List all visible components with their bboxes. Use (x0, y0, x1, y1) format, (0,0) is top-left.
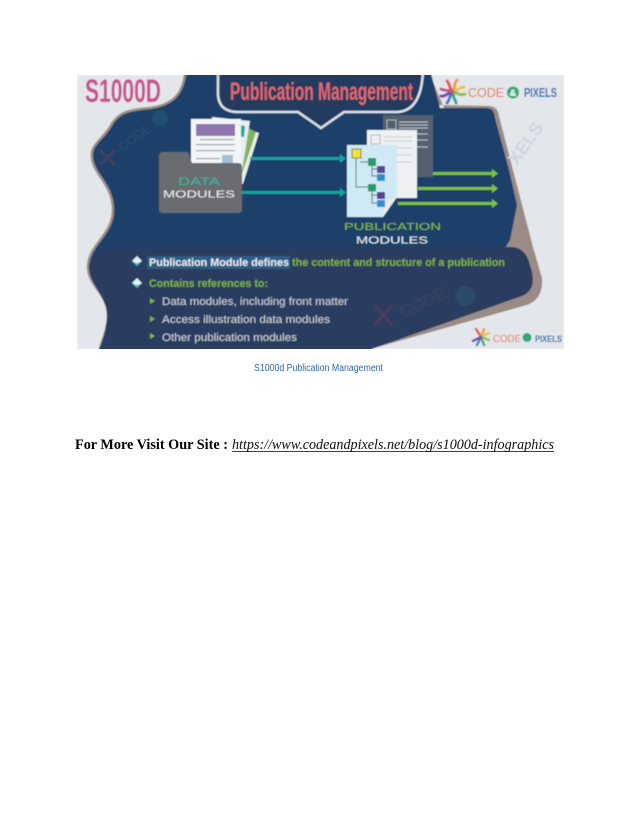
icon: pinwheel logo (441, 80, 465, 103)
dark blue main shape (89, 75, 518, 264)
link label: For More Visit Our Site : (75, 437, 228, 453)
watermark logo lower: CODE (397, 284, 449, 322)
bullet 1 green text: the content and structure of a publication (292, 257, 505, 269)
back document (383, 115, 433, 177)
logo text: CODE (468, 85, 504, 100)
front page (191, 119, 241, 169)
modules label: MODULES (163, 188, 235, 200)
icon: pinwheel logo (473, 329, 489, 345)
middle document (367, 130, 417, 198)
sub-bullet 1: Data modules, including front matter (162, 296, 348, 308)
arrow lower (242, 188, 346, 197)
logo top right (441, 80, 557, 103)
icon: diamond bullet (132, 278, 142, 288)
logo text: CODE (493, 333, 521, 345)
lower text panel (89, 247, 533, 352)
image background (77, 75, 564, 349)
watermark top right: XELS (504, 118, 547, 168)
modules label: MODULES (356, 234, 428, 246)
front document (347, 145, 397, 217)
watermark upper left: CODE (115, 120, 155, 154)
watermark upper left (100, 110, 168, 165)
infographic image (77, 70, 564, 352)
title panel (218, 70, 423, 128)
data modules folder group (159, 117, 259, 213)
folder (159, 152, 242, 213)
watermark logo lower (375, 284, 475, 325)
logo top right: PIXELS (524, 86, 557, 100)
brown border wedge right (376, 83, 543, 348)
sub-bullet 3: Other publication modules (162, 332, 298, 344)
infographic page (75, 75, 564, 452)
arrow 2 (418, 184, 498, 193)
logo bottom right: PIXELS (535, 334, 562, 345)
S1000D heading: S1000D (85, 73, 161, 109)
logo bottom right (473, 329, 562, 345)
site link line (75, 437, 554, 453)
bullet 2 text: Contains references to: (149, 278, 268, 290)
bullet list (132, 256, 505, 344)
publication modules group (344, 115, 441, 246)
tree diagram (355, 158, 378, 204)
data label: DATA (178, 176, 221, 188)
icon: diamond bullet (132, 256, 142, 266)
teal arrows (242, 154, 346, 197)
back pages (241, 131, 260, 185)
arrow 3 (398, 199, 498, 208)
image caption: S1000d Publication Management (254, 363, 383, 374)
publication label: PUBLICATION (344, 221, 441, 233)
title text: Publication Management (230, 78, 413, 106)
link underline (232, 450, 554, 453)
bullet 1 highlight (147, 256, 290, 269)
sub-bullet 2: Access illustration data modules (162, 314, 331, 326)
sub-bullet arrows (150, 298, 155, 339)
arrow upper (250, 154, 346, 163)
left border stroke (88, 70, 185, 352)
logo top right: & (510, 88, 516, 99)
green arrows (398, 169, 498, 208)
arrow 1 (433, 169, 498, 178)
bullet 1 text: Publication Module defines (149, 257, 289, 269)
link url: https://www.codeandpixels.net/blog/s1000d-infographics (232, 437, 554, 453)
